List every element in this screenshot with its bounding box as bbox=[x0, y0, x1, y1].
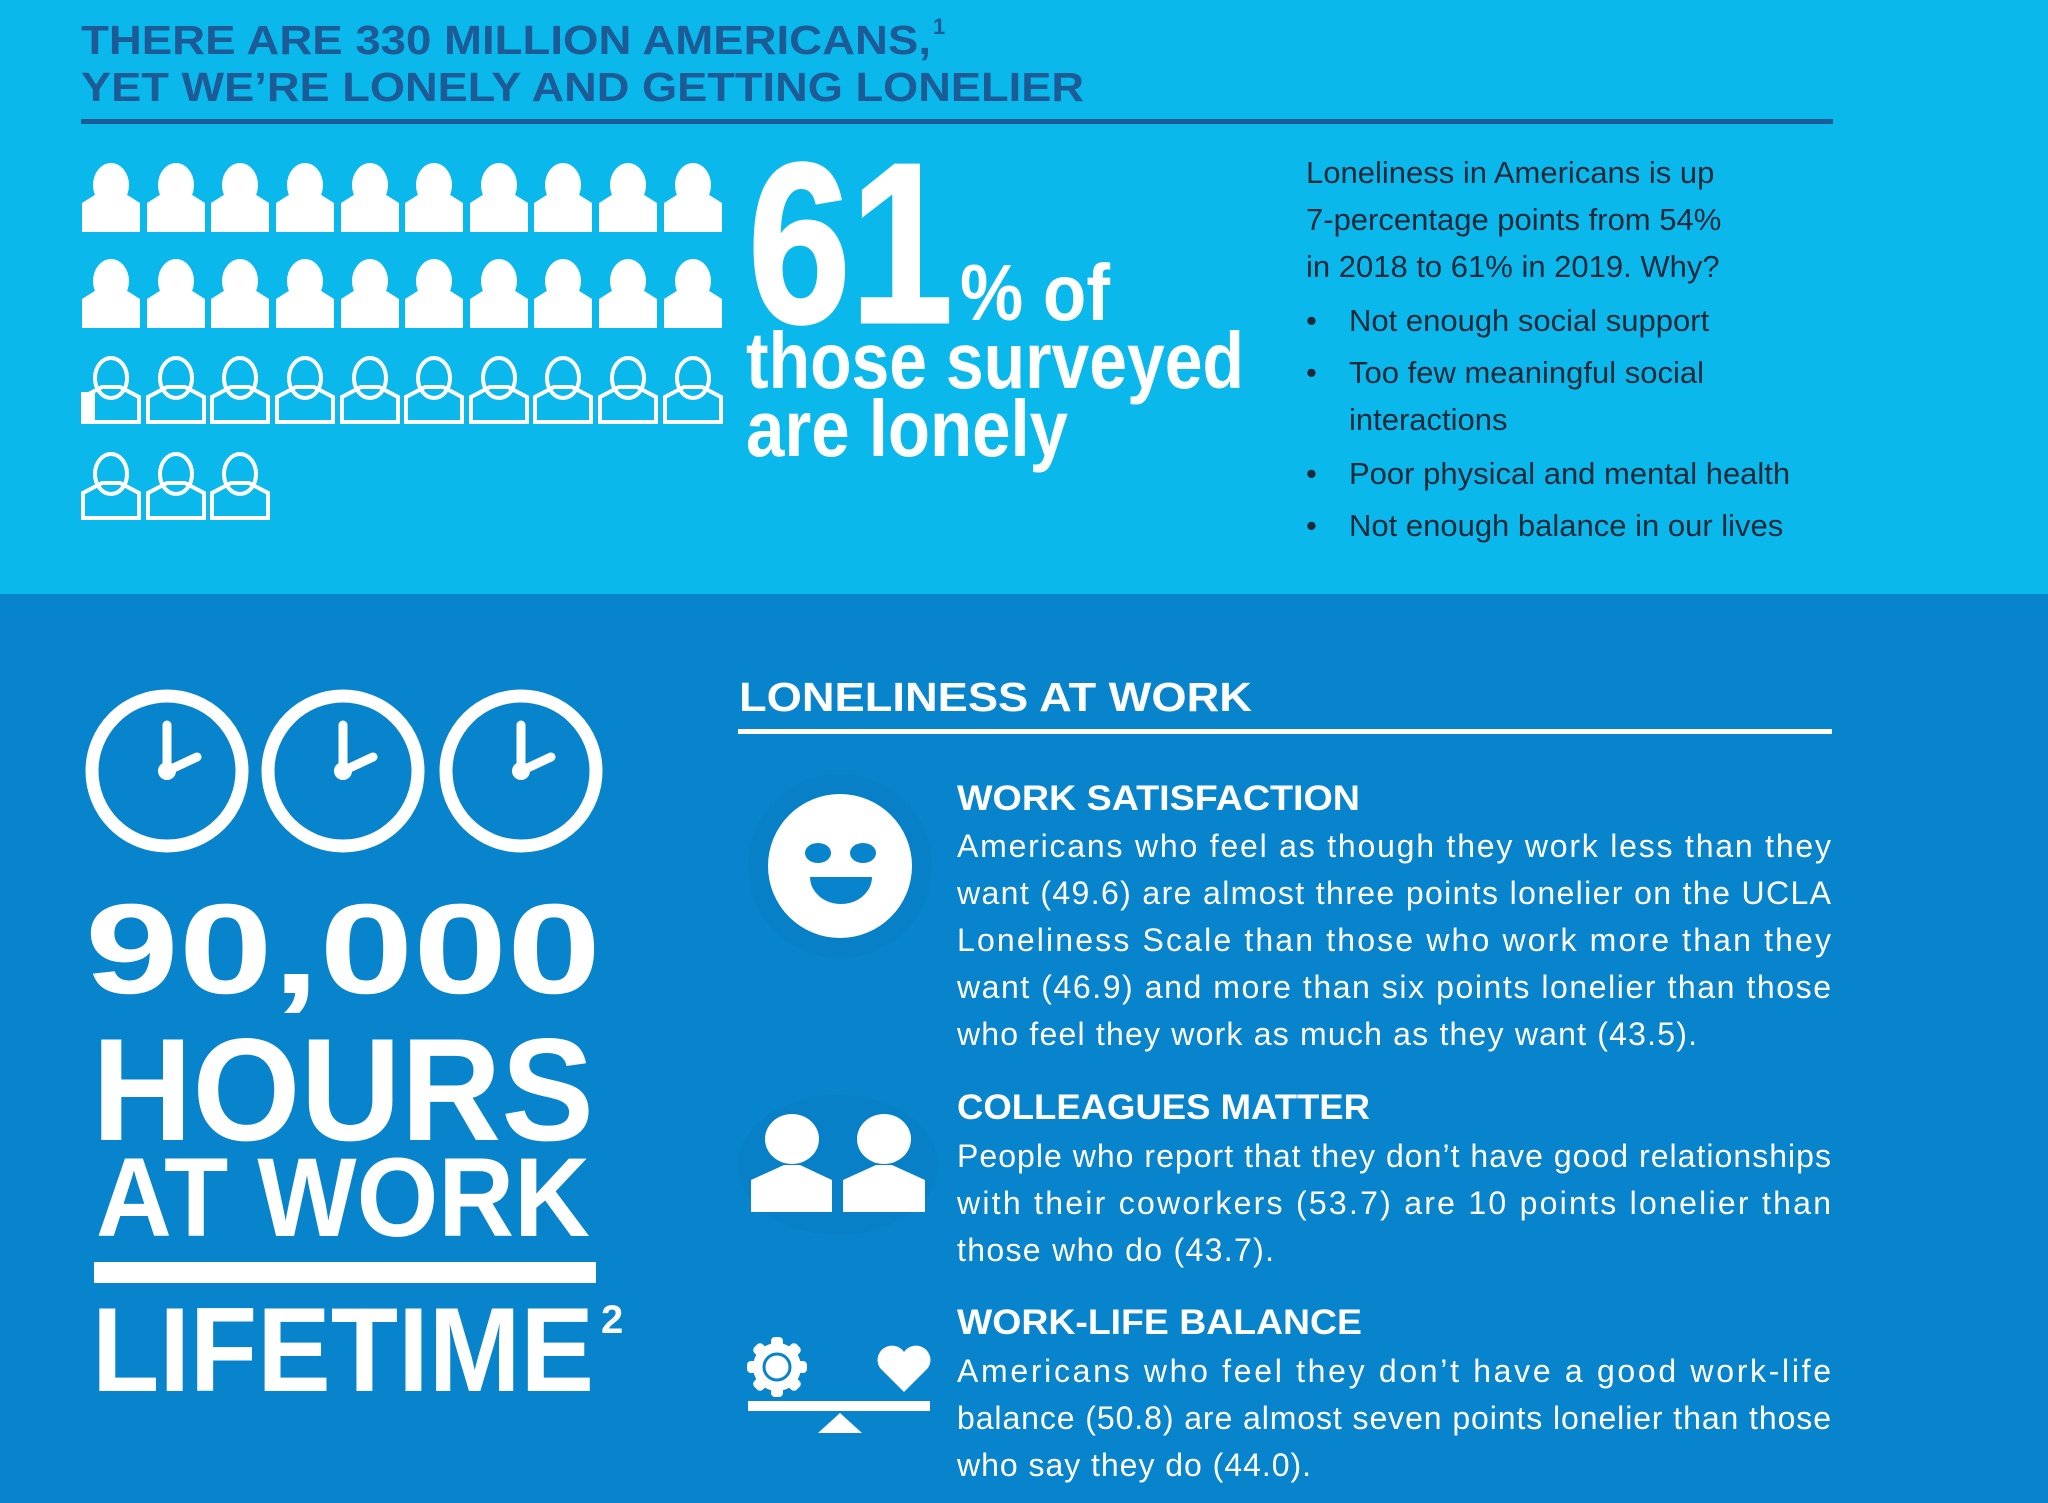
title bbox=[81, 14, 1833, 124]
loneliness reasons text: • bbox=[1306, 303, 1317, 338]
block: work satisfaction: want (46.9) and more than six points lonelier than those bbox=[956, 969, 1831, 1005]
icon: clocks bbox=[92, 696, 596, 846]
block: work-life balance: balance (50.8) are almost seven points lonelier than those bbox=[957, 1400, 1831, 1436]
icon: two people bbox=[738, 1095, 938, 1235]
title: THERE ARE 330 MILLION AMERICANS, bbox=[81, 17, 931, 63]
loneliness reasons text: Poor physical and mental health bbox=[1349, 456, 1790, 491]
loneliness reasons text: 7-percentage points from 54% bbox=[1306, 202, 1721, 237]
heading: loneliness at work: LONELINESS AT WORK bbox=[739, 674, 1252, 720]
big stat 90,000 hours: 90,000 bbox=[85, 878, 601, 1021]
big stat 90,000 hours: AT WORK bbox=[96, 1135, 590, 1260]
loneliness reasons text: Loneliness in Americans is up bbox=[1306, 155, 1714, 190]
icon: smiley bbox=[748, 774, 932, 958]
block: work-life balance: Americans who feel they don’t have a good work-life bbox=[957, 1353, 1831, 1389]
title: YET WE’RE LONELY AND GETTING LONELIER bbox=[81, 64, 1084, 110]
loneliness reasons text: • bbox=[1306, 508, 1317, 543]
big stat 90,000 hours: HOURS bbox=[92, 1008, 594, 1171]
block: work satisfaction: Loneliness Scale than those who work more than they bbox=[957, 922, 1831, 958]
loneliness reasons text: • bbox=[1306, 456, 1317, 491]
loneliness reasons text: interactions bbox=[1349, 402, 1508, 437]
block: work-life balance bbox=[956, 1303, 1831, 1483]
big stat 90,000 hours: LIFETIME bbox=[92, 1283, 594, 1417]
loneliness reasons text: • bbox=[1306, 355, 1317, 390]
loneliness reasons text bbox=[1306, 155, 1790, 543]
block: work satisfaction: who feel they work as much as they want (43.5). bbox=[956, 1016, 1697, 1052]
loneliness reasons text: Not enough social support bbox=[1349, 303, 1710, 338]
loneliness reasons text: in 2018 to 61% in 2019. Why? bbox=[1306, 249, 1720, 284]
block: work satisfaction: Americans who feel as though they work less than they bbox=[957, 828, 1831, 864]
block: work satisfaction bbox=[956, 779, 1832, 1052]
loneliness reasons text: Too few meaningful social bbox=[1349, 355, 1704, 390]
block: colleagues matter: COLLEAGUES MATTER bbox=[957, 1088, 1370, 1127]
big stat 90,000 hours: 2 bbox=[601, 1298, 623, 1342]
big stat 61%: 61 bbox=[748, 117, 953, 371]
block: work satisfaction: want (49.6) are almost three points lonelier on the UCLA bbox=[956, 875, 1832, 911]
big stat 61%: are lonely bbox=[746, 384, 1068, 473]
people icon grid bbox=[81, 163, 722, 518]
block: colleagues matter bbox=[956, 1088, 1831, 1268]
block: colleagues matter: those who do (43.7). bbox=[957, 1232, 1274, 1268]
top panel background bbox=[0, 0, 2048, 594]
big stat 90,000 hours bbox=[85, 878, 623, 1417]
title: 1 bbox=[933, 14, 945, 39]
block: work satisfaction: WORK SATISFACTION bbox=[957, 779, 1360, 818]
icon: work-life balance scale bbox=[747, 1337, 930, 1433]
big stat 61% bbox=[746, 117, 1244, 473]
bottom panel background bbox=[0, 594, 2048, 1503]
block: work-life balance: who say they do (44.0). bbox=[956, 1447, 1311, 1483]
block: work-life balance: WORK-LIFE BALANCE bbox=[957, 1303, 1362, 1342]
big stat 61%: those surveyed bbox=[746, 316, 1244, 405]
loneliness reasons text: Not enough balance in our lives bbox=[1349, 508, 1783, 543]
block: colleagues matter: with their coworkers (53.7) are 10 points lonelier than bbox=[956, 1185, 1831, 1221]
heading: loneliness at work bbox=[738, 674, 1832, 734]
block: colleagues matter: People who report that they don’t have good relationships bbox=[957, 1138, 1831, 1174]
big stat 61%: % of bbox=[960, 248, 1110, 337]
